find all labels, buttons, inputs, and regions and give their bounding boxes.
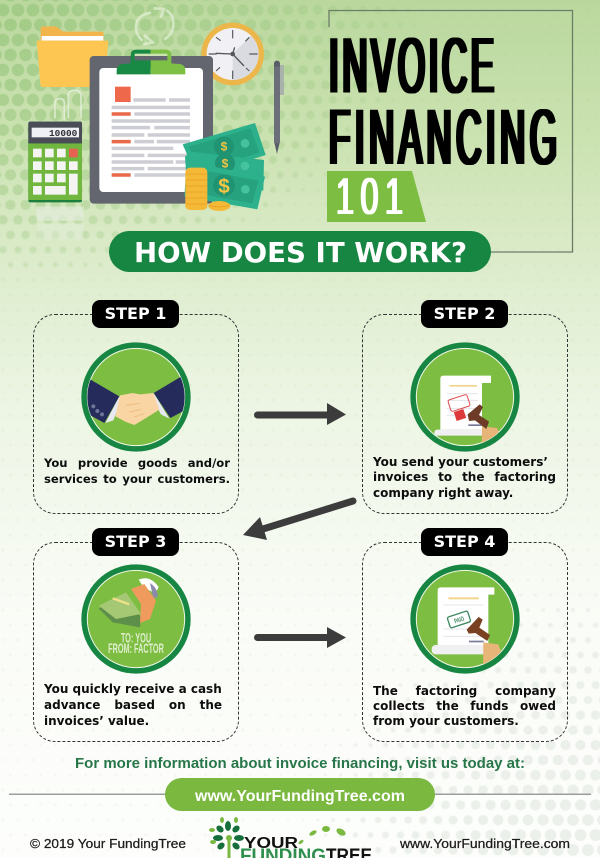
step 4 text: The factoring company bbox=[373, 684, 556, 698]
icon: cash in hand: TO: YOU bbox=[121, 629, 151, 645]
title frame bbox=[328, 10, 574, 253]
icon: calculator: 10000 bbox=[49, 128, 78, 139]
badge: 101 bbox=[327, 168, 426, 226]
step 1 label: STEP 1 bbox=[105, 304, 166, 323]
step 2 label: STEP 2 bbox=[434, 304, 495, 323]
step 2 text: You send your customers’ bbox=[373, 455, 548, 469]
icon: cash notes bbox=[183, 123, 266, 209]
copyright: © 2019 Your FundingTree bbox=[30, 837, 186, 851]
step 2 text: company right away. bbox=[373, 486, 513, 500]
icon: cash notes: $ bbox=[218, 175, 230, 198]
icon: gold coins bbox=[185, 168, 230, 211]
step 3 text: You quickly receive a cash bbox=[44, 682, 222, 696]
title bbox=[329, 21, 557, 181]
badge: 101: 101 bbox=[336, 168, 403, 226]
step 3 label bbox=[92, 528, 179, 556]
panel: step 3 bbox=[33, 528, 239, 742]
panel: step 2 bbox=[362, 300, 568, 514]
icon: cash in hand bbox=[81, 564, 191, 674]
illustration: office and finance items bbox=[28, 7, 284, 240]
icon: paperclip bbox=[55, 90, 81, 120]
panel: step 4 bbox=[362, 528, 568, 742]
step 1 text: You provide goods and/or bbox=[44, 456, 230, 470]
icon: handshake bbox=[81, 342, 191, 452]
icon: cash notes: $ bbox=[222, 157, 229, 171]
step 1 text bbox=[44, 456, 230, 486]
icon: folder bbox=[37, 26, 108, 87]
step 3 text: invoices’ value. bbox=[44, 714, 149, 728]
step 4 label bbox=[421, 528, 508, 556]
icon: green stamped invoice bbox=[410, 564, 520, 674]
step 4 text bbox=[373, 684, 556, 728]
footer website: www.YourFundingTree.com bbox=[399, 837, 570, 851]
step 3 text: advance based on the bbox=[44, 698, 222, 712]
step 3 label: STEP 3 bbox=[105, 532, 166, 551]
divider and website pill: www.YourFundingTree.com bbox=[194, 788, 405, 805]
logo: Your Funding Tree: YOUR bbox=[244, 835, 298, 852]
panel: step 1 bbox=[33, 300, 239, 514]
title: INVOICE bbox=[329, 21, 494, 109]
title: FINANCING bbox=[329, 93, 557, 181]
step 4 label: STEP 4 bbox=[434, 532, 495, 551]
icon: pen bbox=[274, 61, 284, 154]
icon: recycle arrows bbox=[136, 8, 173, 44]
step 4 text: collects the funds owed bbox=[373, 699, 556, 713]
icon: green stamped invoice: PAID bbox=[453, 616, 465, 625]
step 3 text bbox=[44, 682, 222, 728]
icon: calculator reflection bbox=[37, 207, 83, 239]
step 1 text: services to your customers. bbox=[44, 472, 230, 486]
icon: clipboard bbox=[90, 50, 213, 204]
step 4 text: from your customers. bbox=[373, 714, 519, 728]
icon: clock bbox=[201, 23, 264, 85]
step 1 label bbox=[92, 300, 179, 328]
banner: how does it work bbox=[109, 231, 491, 272]
icon: cash notes: $ bbox=[221, 140, 228, 154]
step 2 label bbox=[421, 300, 508, 328]
icon: red stamped invoice bbox=[410, 342, 520, 452]
banner: how does it work: HOW DOES IT WORK? bbox=[134, 237, 467, 269]
step 2 text: invoices to the factoring bbox=[373, 470, 556, 484]
call to action text: For more information about invoice financing, visit us today at: bbox=[75, 756, 525, 772]
step 2 text bbox=[372, 455, 556, 500]
icon: calculator bbox=[28, 122, 82, 202]
